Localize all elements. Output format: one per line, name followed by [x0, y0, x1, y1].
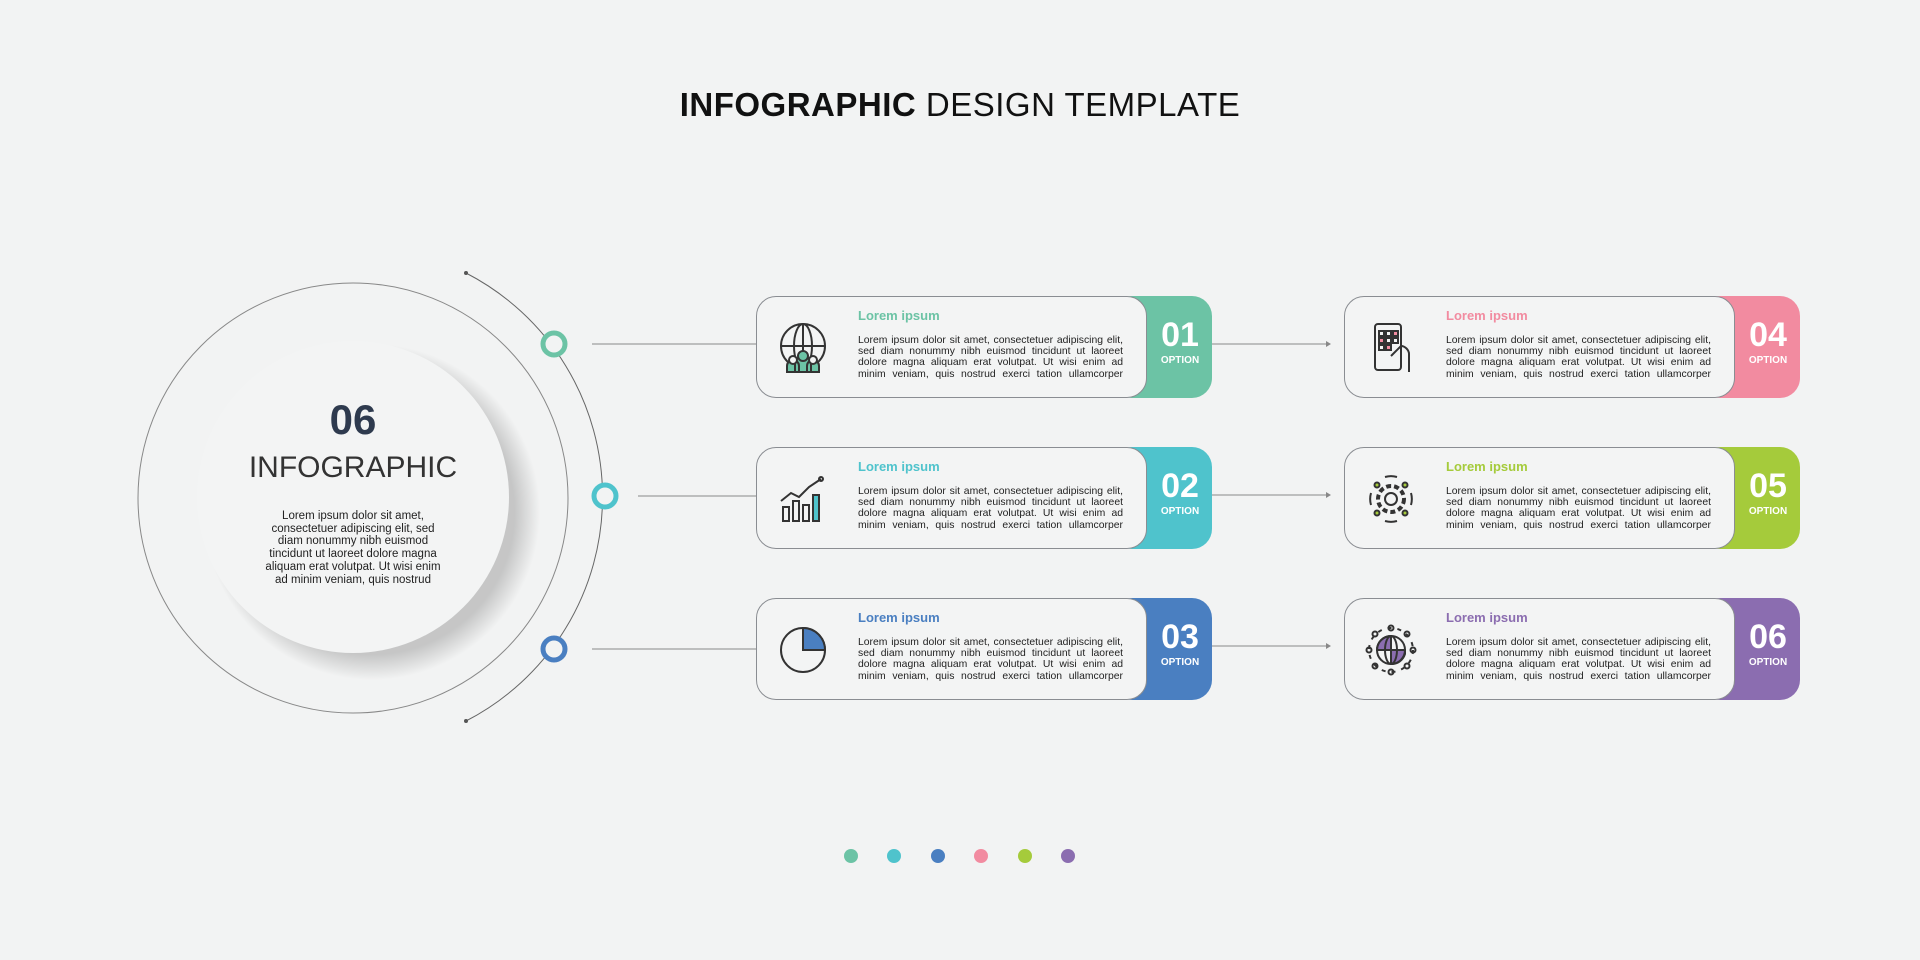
- option 01: dolore magna aliquam erat volutpat. Ut wisi enim ad: [858, 357, 1123, 368]
- option 05: Lorem ipsum dolor sit amet, consectetuer adipiscing elit,: [1446, 486, 1711, 497]
- option 01: Lorem ipsum: [858, 308, 940, 323]
- option 01: minim veniam, quis nostrud exerci tation ullamcorper: [858, 369, 1123, 380]
- option 02: sed diam nonummy nibh euismod tincidunt ut laoreet: [858, 497, 1123, 508]
- option 04: [1344, 296, 1800, 398]
- option 02: [756, 447, 1212, 549]
- option 04: minim veniam, quis nostrud exerci tation ullamcorper: [1446, 369, 1711, 380]
- center text: Lorem ipsum dolor sit amet, consectetuer adipiscing elit, sed diam nonummy nibh euismod tincidunt ut laoreet dolore magna aliquam erat volutpat. Ut wisi enim ad minim veniam, quis nostrud: [265, 510, 441, 586]
- option 01: [756, 296, 1212, 398]
- option 03: sed diam nonummy nibh euismod tincidunt ut laoreet: [858, 648, 1123, 659]
- option 05: minim veniam, quis nostrud exerci tation ullamcorper: [1446, 520, 1711, 531]
- option 06: 06: [1749, 618, 1787, 656]
- center text: [249, 396, 457, 586]
- center text: INFOGRAPHIC: [249, 451, 457, 484]
- option 06: Lorem ipsum: [1446, 610, 1528, 625]
- option 03: Lorem ipsum dolor sit amet, consectetuer adipiscing elit,: [858, 637, 1123, 648]
- option 04: 04: [1749, 316, 1787, 354]
- option 01: 01: [1161, 316, 1199, 354]
- option 04: OPTION: [1749, 355, 1787, 366]
- option 06: [1344, 598, 1800, 700]
- option 01: OPTION: [1161, 355, 1199, 366]
- option 06: minim veniam, quis nostrud exerci tation ullamcorper: [1446, 671, 1711, 682]
- option 02: OPTION: [1161, 506, 1199, 517]
- option 05: Lorem ipsum: [1446, 459, 1528, 474]
- option 05: sed diam nonummy nibh euismod tincidunt ut laoreet: [1446, 497, 1711, 508]
- option 05: [1344, 447, 1800, 549]
- option 05: 05: [1749, 467, 1787, 505]
- option 03: Lorem ipsum: [858, 610, 940, 625]
- option 03: minim veniam, quis nostrud exerci tation ullamcorper: [858, 671, 1123, 682]
- option 02: dolore magna aliquam erat volutpat. Ut wisi enim ad: [858, 508, 1123, 519]
- option 05: OPTION: [1749, 506, 1787, 517]
- option 06: OPTION: [1749, 657, 1787, 668]
- option 03: OPTION: [1161, 657, 1199, 668]
- option 04: Lorem ipsum: [1446, 308, 1528, 323]
- option 01: Lorem ipsum dolor sit amet, consectetuer adipiscing elit,: [858, 335, 1123, 346]
- option 02: 02: [1161, 467, 1199, 505]
- option 02: Lorem ipsum: [858, 459, 940, 474]
- option 03: 03: [1161, 618, 1199, 656]
- title: INFOGRAPHIC DESIGN TEMPLATE: [680, 86, 1240, 123]
- option 06: Lorem ipsum dolor sit amet, consectetuer adipiscing elit,: [1446, 637, 1711, 648]
- option 03: dolore magna aliquam erat volutpat. Ut wisi enim ad: [858, 659, 1123, 670]
- option 05: dolore magna aliquam erat volutpat. Ut wisi enim ad: [1446, 508, 1711, 519]
- option 01: sed diam nonummy nibh euismod tincidunt ut laoreet: [858, 346, 1123, 357]
- option 06: dolore magna aliquam erat volutpat. Ut wisi enim ad: [1446, 659, 1711, 670]
- option 04: sed diam nonummy nibh euismod tincidunt ut laoreet: [1446, 346, 1711, 357]
- option 04: dolore magna aliquam erat volutpat. Ut wisi enim ad: [1446, 357, 1711, 368]
- center text: 06: [330, 396, 376, 443]
- legend dots: [844, 849, 1075, 863]
- option 02: Lorem ipsum dolor sit amet, consectetuer adipiscing elit,: [858, 486, 1123, 497]
- option 06: sed diam nonummy nibh euismod tincidunt ut laoreet: [1446, 648, 1711, 659]
- option 02: minim veniam, quis nostrud exerci tation ullamcorper: [858, 520, 1123, 531]
- option 04: Lorem ipsum dolor sit amet, consectetuer adipiscing elit,: [1446, 335, 1711, 346]
- option 03: [756, 598, 1212, 700]
